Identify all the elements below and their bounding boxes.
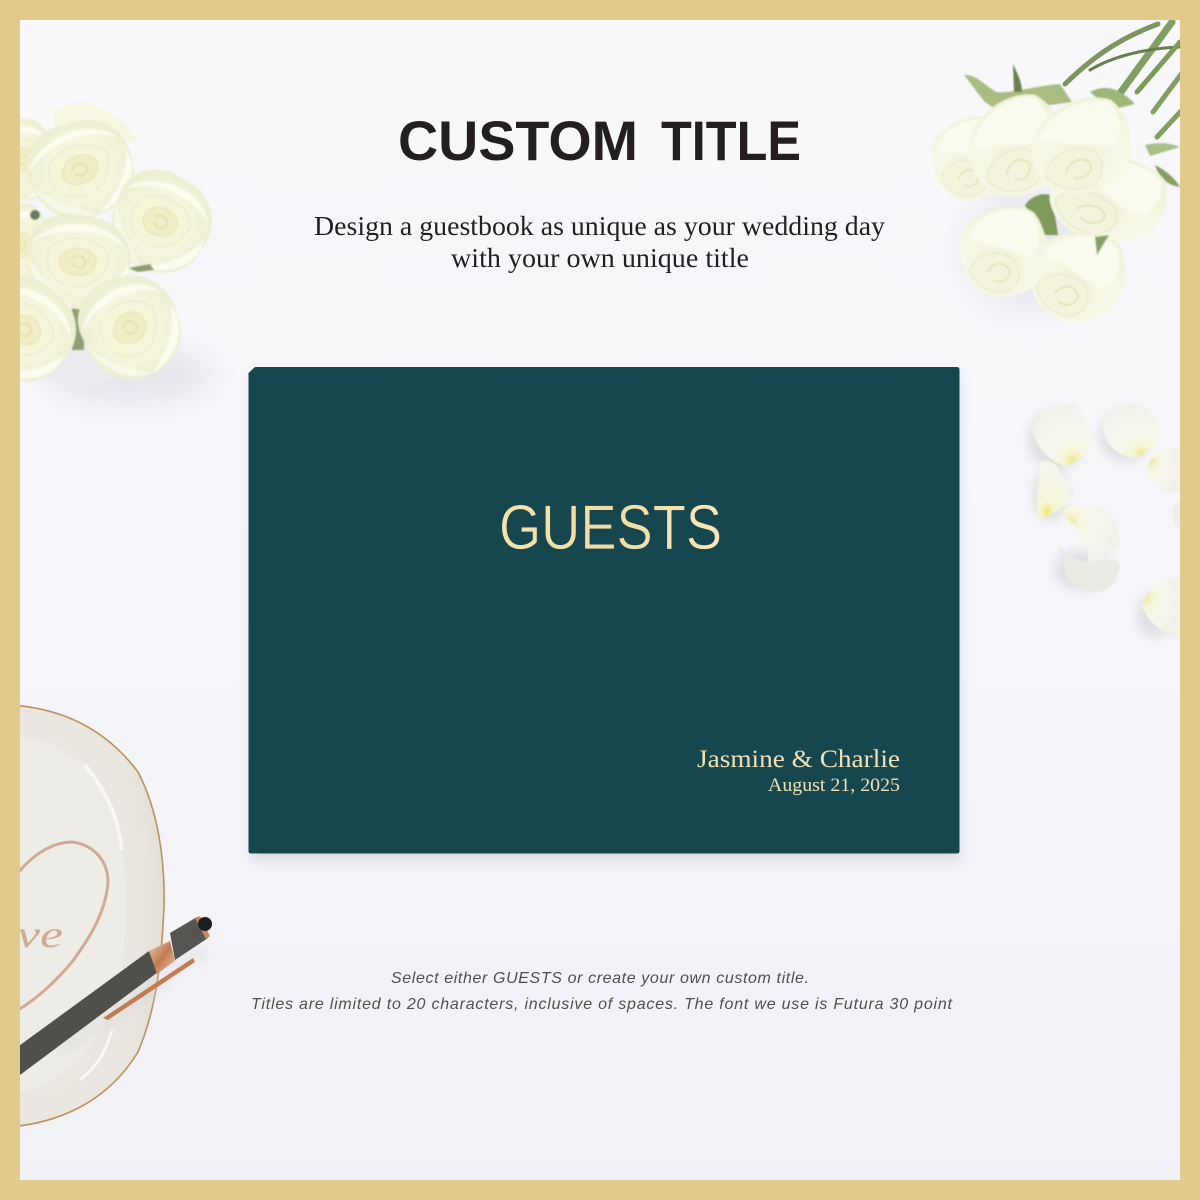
cover names: Jasmine & Charlie [697,744,900,773]
shadow: left bouquet [56,352,207,404]
pen [12,916,212,1081]
left rose bouquet [20,102,212,382]
rose leaves and sepals [964,64,1180,235]
right rose bouquet [930,94,1167,322]
cover date: August 21, 2025 [768,775,900,796]
book shadow [252,375,960,861]
subtitle: with your own unique title [451,243,749,273]
plate heart outline [18,842,108,1010]
main heading [398,109,801,172]
caption note: Titles are limited to 20 characters, inclusive of spaces. The font we use is Futura 30 point [251,996,953,1013]
rose stems [1065,22,1182,137]
plate [10,705,164,1127]
scattered rose petals [1032,404,1182,640]
caption note: Select either GUESTS or create your own custom title. [391,970,809,987]
plate lettering: ve [17,914,63,956]
guestbook cover [248,367,960,854]
subtitle: Design a guestbook as unique as your wedding day [314,211,886,241]
petal shadows [1028,410,1176,637]
caption note [251,970,953,1013]
main heading: CUSTOM [398,109,638,172]
subtitle [314,211,886,273]
cover title: GUESTS [499,493,722,563]
main heading: TITLE [661,109,801,172]
bowl under left bouquet [28,330,130,387]
shadow: right bouquet [976,190,1073,310]
